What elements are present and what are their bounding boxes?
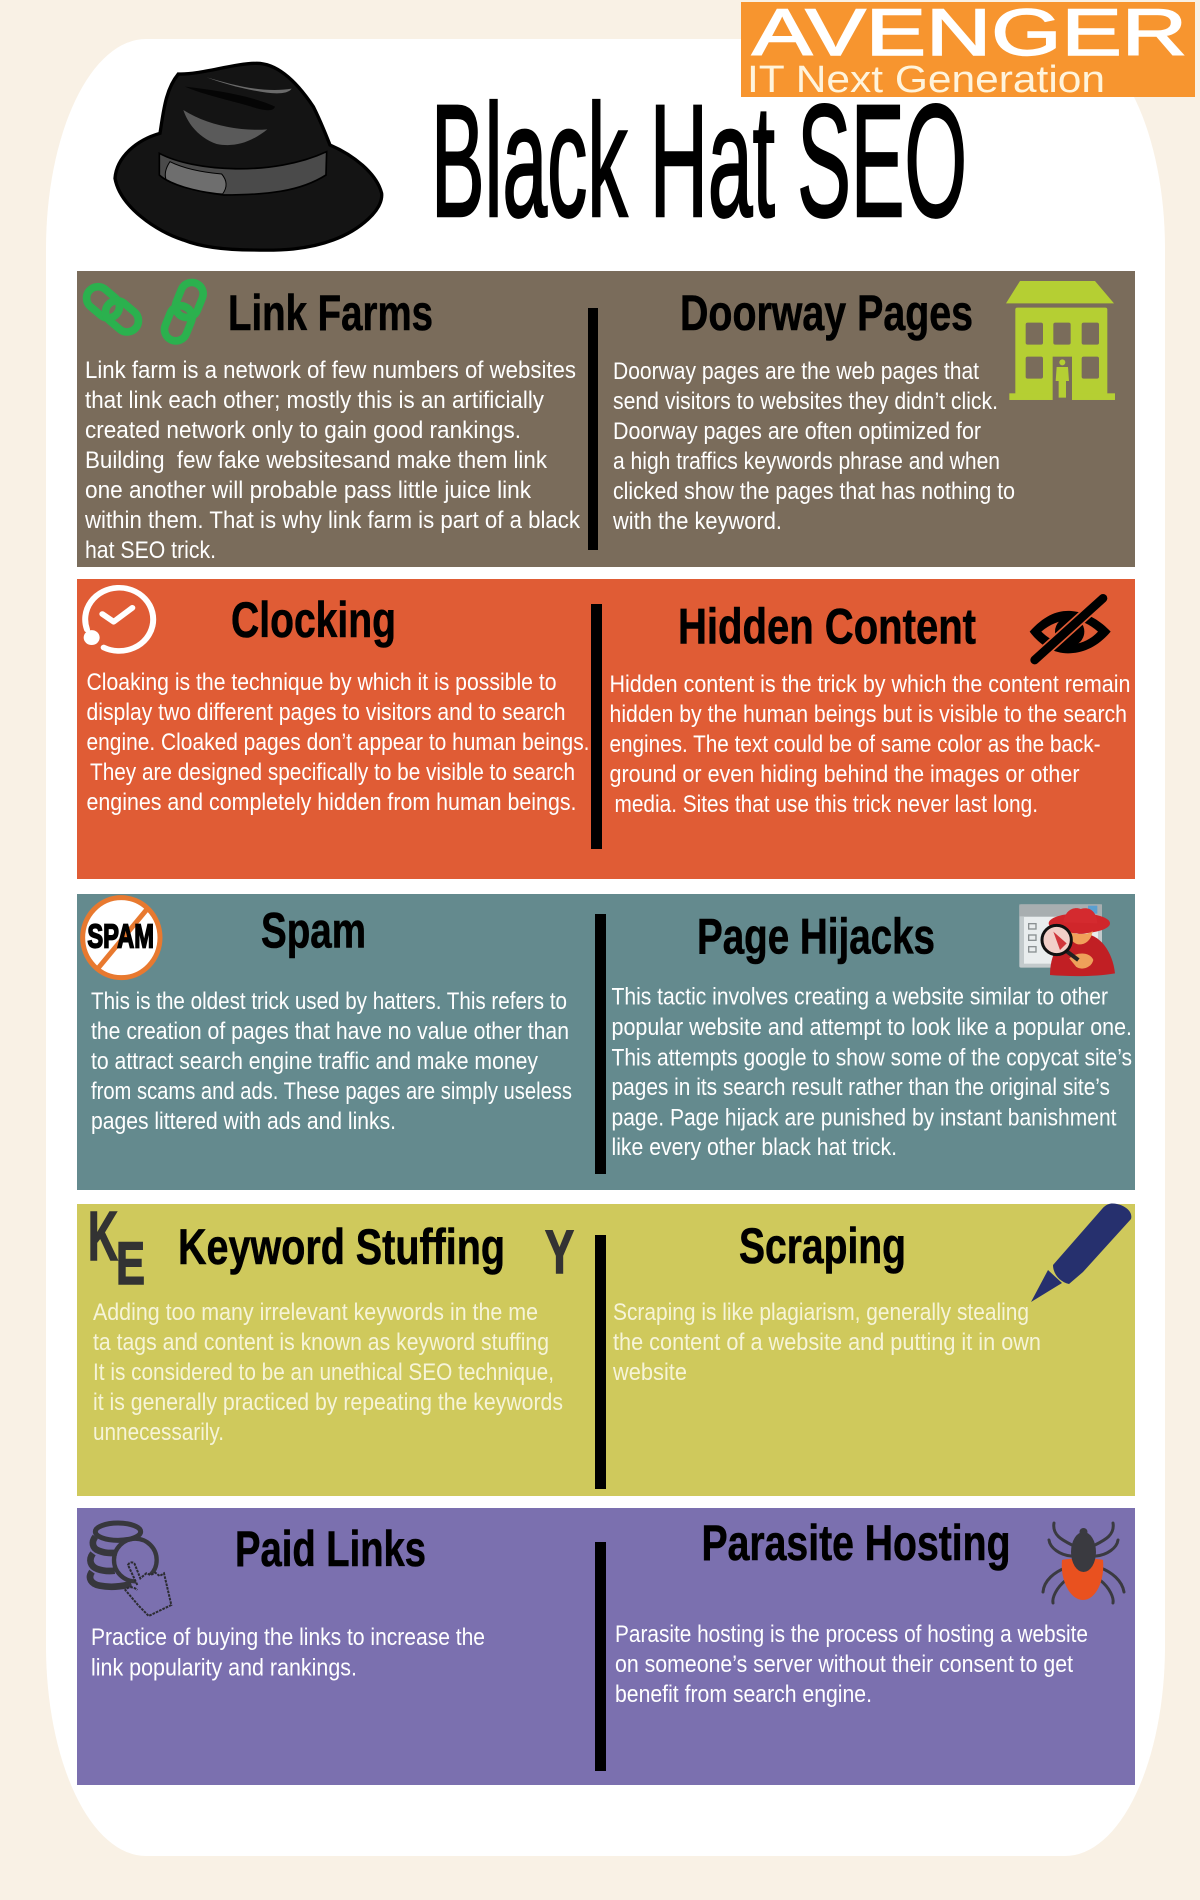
text: Page Hijacks body: [612, 984, 1132, 1161]
panel: Keyword Stuffing and Scraping: [77, 1197, 1135, 1496]
divider: [595, 1542, 606, 1771]
icon: coin stack with pointer hand: [90, 1523, 171, 1616]
text: Scraping body: the content of a website and putting it in own: [613, 1329, 1041, 1356]
text: Doorway Pages body: clicked show the pages that has nothing to: [613, 478, 1015, 505]
heading: Hidden Content: Hidden Content: [678, 598, 976, 654]
heading: Page Hijacks: Page Hijacks: [697, 908, 935, 964]
logo: Avenger IT Next Generation: [741, 0, 1195, 101]
heading: Parasite Hosting: Parasite Hosting: [702, 1515, 1010, 1571]
text: Spam body: This is the oldest trick used by hatters. This refers to: [91, 988, 567, 1015]
heading: Scraping: Scraping: [739, 1218, 906, 1274]
text: Hidden Content body: [610, 671, 1130, 818]
icon: black fedora hat: [115, 63, 382, 250]
text: Keyword Stuffing body: ta tags and content is known as keyword stuffing: [93, 1329, 549, 1356]
text: Doorway Pages body: Doorway pages are the web pages that: [613, 358, 979, 385]
heading: Spam: Spam: [261, 902, 366, 958]
text: Link Farms body: one another will probable pass little juice link: [85, 477, 532, 504]
icon: green building: [1006, 281, 1115, 400]
text: Doorway Pages body: send visitors to websites they didn’t click.: [613, 388, 998, 415]
icon: scattered letters K E Y: K: [88, 1197, 118, 1275]
icon: tick spider: [1043, 1523, 1124, 1603]
text: Clocking body: engine. Cloaked pages don’t appear to human beings.: [86, 729, 590, 756]
icon: no spam badge: [83, 898, 160, 978]
text: Link Farms body: [84, 357, 581, 564]
icon: green chain links: [82, 279, 207, 344]
text: Scraping body: [612, 1299, 1041, 1386]
text: Paid Links body: Practice of buying the links to increase the: [91, 1624, 485, 1651]
heading: Paid Links: Paid Links: [235, 1521, 426, 1577]
icon: scattered letters K E Y: E: [116, 1230, 145, 1297]
logo: Avenger IT Next Generation: IT Next Generation: [747, 59, 1105, 101]
text: Keyword Stuffing body: [93, 1299, 563, 1446]
icon: no spam badge: SPAM: [87, 918, 154, 955]
text: Link Farms body: Building few fake websitesand make them link: [85, 447, 548, 474]
text: Page Hijacks body: pages in its search result rather than the original site’s: [612, 1074, 1110, 1101]
text: Doorway Pages body: [612, 358, 1015, 535]
heading: Link Farms: Link Farms: [228, 285, 433, 341]
icon: clock with check: [84, 588, 153, 651]
text: Doorway Pages body: Doorway pages are often optimized for: [613, 418, 981, 445]
text: Paid Links body: [91, 1624, 485, 1682]
text: Keyword Stuffing body: Adding too many irrelevant keywords in the me: [93, 1299, 538, 1326]
text: Spam body: pages littered with ads and links.: [91, 1108, 396, 1135]
text: Doorway Pages body: with the keyword.: [612, 508, 782, 535]
text: Paid Links body: link popularity and rankings.: [91, 1654, 357, 1682]
panel: Paid Links and Parasite Hosting: [77, 1508, 1135, 1785]
icon: blue pen: [1031, 1204, 1131, 1302]
text: Scraping body: website: [612, 1359, 687, 1386]
text: Keyword Stuffing body: it is generally practiced by repeating the keywords: [93, 1389, 563, 1416]
icon: scattered letters K E Y: [88, 1197, 574, 1297]
text: Clocking body: display two different pages to visitors and to search: [86, 699, 566, 726]
heading: Keyword Stuffing: Keyword Stuffing: [178, 1219, 505, 1275]
text: Link Farms body: that link each other; mostly this is an artificially: [85, 387, 544, 414]
panel: Clocking and Hidden Content: [77, 579, 1135, 879]
heading: Doorway Pages: Doorway Pages: [680, 285, 973, 341]
text: Link Farms body: Link farm is a network of few numbers of websites: [85, 357, 576, 384]
text: Hidden Content body: Hidden content is the trick by which the content remain: [610, 671, 1130, 698]
text: Page Hijacks body: This tactic involves creating a website similar to other: [612, 984, 1108, 1010]
text: Hidden Content body: engines. The text could be of same color as the back-: [610, 731, 1100, 758]
text: Parasite Hosting body: Parasite hosting is the process of hosting a website: [615, 1621, 1088, 1648]
divider: [591, 604, 602, 849]
icon: red spy with magnifier over window: [1019, 904, 1115, 976]
panel: Link Farms and Doorway Pages: [77, 271, 1135, 567]
text: Scraping body: Scraping is like plagiarism, generally stealing: [613, 1299, 1029, 1326]
text: Spam body: [91, 988, 572, 1135]
text: Spam body: to attract search engine traffic and make money: [91, 1048, 538, 1075]
text: Hidden Content body: media. Sites that use this trick never last long.: [614, 791, 1038, 818]
text: Keyword Stuffing body: unnecessarily.: [93, 1419, 224, 1446]
divider: [595, 914, 606, 1174]
text: Clocking body: They are designed specifically to be visible to search: [90, 759, 575, 786]
text: Parasite Hosting body: on someone’s server without their consent to get: [615, 1651, 1073, 1678]
text: Clocking body: [86, 669, 590, 816]
text: Clocking body: Cloaking is the technique by which it is possible to: [86, 669, 556, 696]
text: Page Hijacks body: page. Page hijack are punished by instant banishment: [612, 1104, 1117, 1132]
text: Keyword Stuffing body: It is considered to be an unethical SEO technique,: [93, 1359, 554, 1386]
icon: crossed-out eye: [1030, 598, 1111, 660]
divider: [595, 1235, 606, 1489]
text: Link Farms body: hat SEO trick.: [85, 537, 216, 564]
text: Page Hijacks body: like every other black hat trick.: [612, 1134, 897, 1161]
text: Clocking body: engines and completely hidden from human beings.: [86, 789, 576, 816]
text: Spam body: the creation of pages that have no value other than: [91, 1018, 569, 1045]
text: Page Hijacks body: popular website and attempt to look like a popular one.: [612, 1014, 1132, 1041]
text: Page Hijacks body: This attempts google to show some of the copycat site’s: [612, 1044, 1132, 1072]
divider: [588, 308, 598, 550]
panel: Spam and Page Hijacks: [77, 894, 1135, 1190]
text: Parasite Hosting body: benefit from search engine.: [615, 1681, 872, 1708]
text: Link Farms body: within them. That is why link farm is part of a black: [84, 507, 581, 534]
text: Hidden Content body: hidden by the human beings but is visible to the search: [610, 701, 1127, 728]
icon: scattered letters K E Y: Y: [545, 1218, 574, 1286]
text: Doorway Pages body: a high traffics keywords phrase and when: [613, 448, 1000, 475]
text: Hidden Content body: ground or even hiding behind the images or other: [610, 761, 1080, 788]
text: Parasite Hosting body: [615, 1621, 1088, 1708]
text: Spam body: from scams and ads. These pages are simply useless: [91, 1078, 572, 1105]
text: Link Farms body: created network only to gain good rankings.: [85, 417, 521, 444]
heading: Clocking: Clocking: [231, 592, 396, 648]
